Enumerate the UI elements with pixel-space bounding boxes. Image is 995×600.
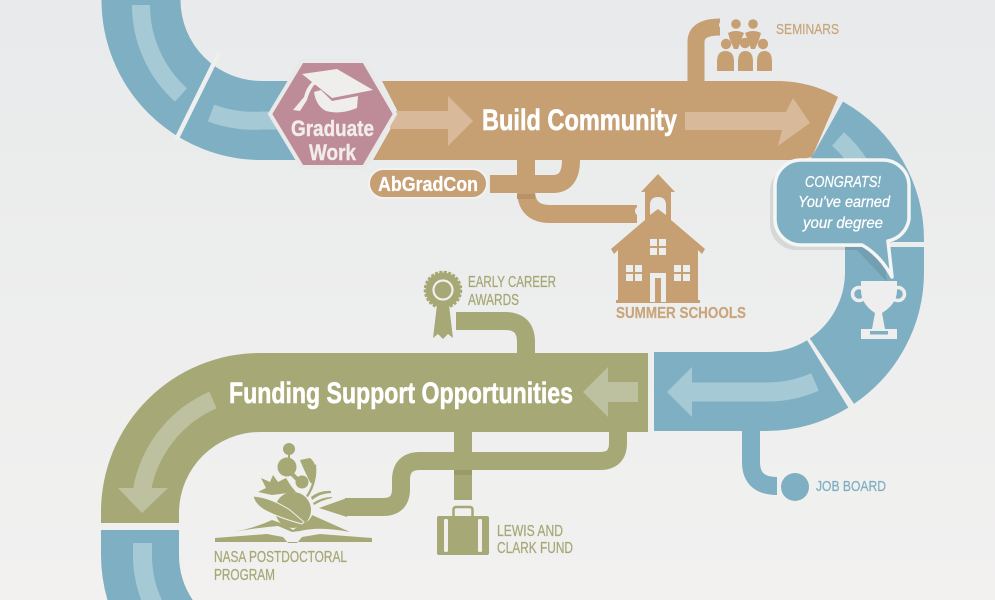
label: lewis and clark fund [497,523,573,557]
callout: congrats bubble [775,160,909,277]
abgradcon pill [369,169,487,198]
arrow: olive right arrow [583,367,638,417]
bottom-left blue path segment [101,530,193,600]
icon: briefcase [437,507,489,555]
right blue curve segments [654,136,885,392]
heading: build community: Build Community [482,104,677,137]
summer schools pipe [526,158,637,214]
abgradcon pill: AbGradCon [378,174,478,196]
callout: congrats bubble: You've earned [798,194,891,211]
tan band [373,81,838,160]
arrow: second tan arrow [685,98,810,146]
awards pipe [456,321,526,358]
label: lewis and clark fund: CLARK FUND [497,540,573,557]
label: job board: JOB BOARD [816,478,886,495]
top-left blue path segment [141,0,300,140]
label: nasa postdoctoral program: PROGRAM [214,567,275,584]
icon: seminars people [717,19,772,71]
callout: congrats bubble: your degree [802,215,883,232]
label: nasa postdoctoral program: NASA POSTDOCTORAL [214,549,347,566]
label: lewis and clark fund: LEWIS AND [497,523,563,540]
hexagon: graduate work [270,61,395,167]
label: early career awards [468,274,556,309]
label: early career awards: EARLY CAREER [468,274,556,291]
abgradcon pipe [490,160,571,184]
speech bubble shadow [770,165,904,282]
olive band [101,353,648,523]
icon: trophy [852,281,904,339]
label: early career awards: AWARDS [468,292,519,309]
callout: congrats bubble: CONGRATS! [805,174,881,191]
icon: graduation cap [293,69,373,112]
tan path: build community band [373,21,838,216]
nasa pipe [345,428,618,507]
icon: award rosette [425,272,461,339]
job board pipe and dot [751,428,809,501]
arrow: lower blue arrow [692,382,815,392]
heading: funding support opportunities: Funding Support Opportunities [229,377,573,410]
icon: nasa postdoctoral logo [215,443,372,543]
icon: schoolhouse [611,174,705,303]
arrow: first tan arrow [390,96,473,146]
arrow head: lower blue arrow [667,367,692,417]
label: nasa postdoctoral program [214,549,347,584]
hexagon label: Graduate [291,116,374,141]
seminars pipe [696,27,720,85]
briefcase pipe [454,428,472,500]
label: summer schools: SUMMER SCHOOLS [616,305,746,322]
hexagon: graduate work: Work [309,140,357,165]
olive band and pipes [101,321,648,523]
label: seminars: SEMINARS [776,21,839,38]
arrow: olive curved arrow [142,400,213,490]
